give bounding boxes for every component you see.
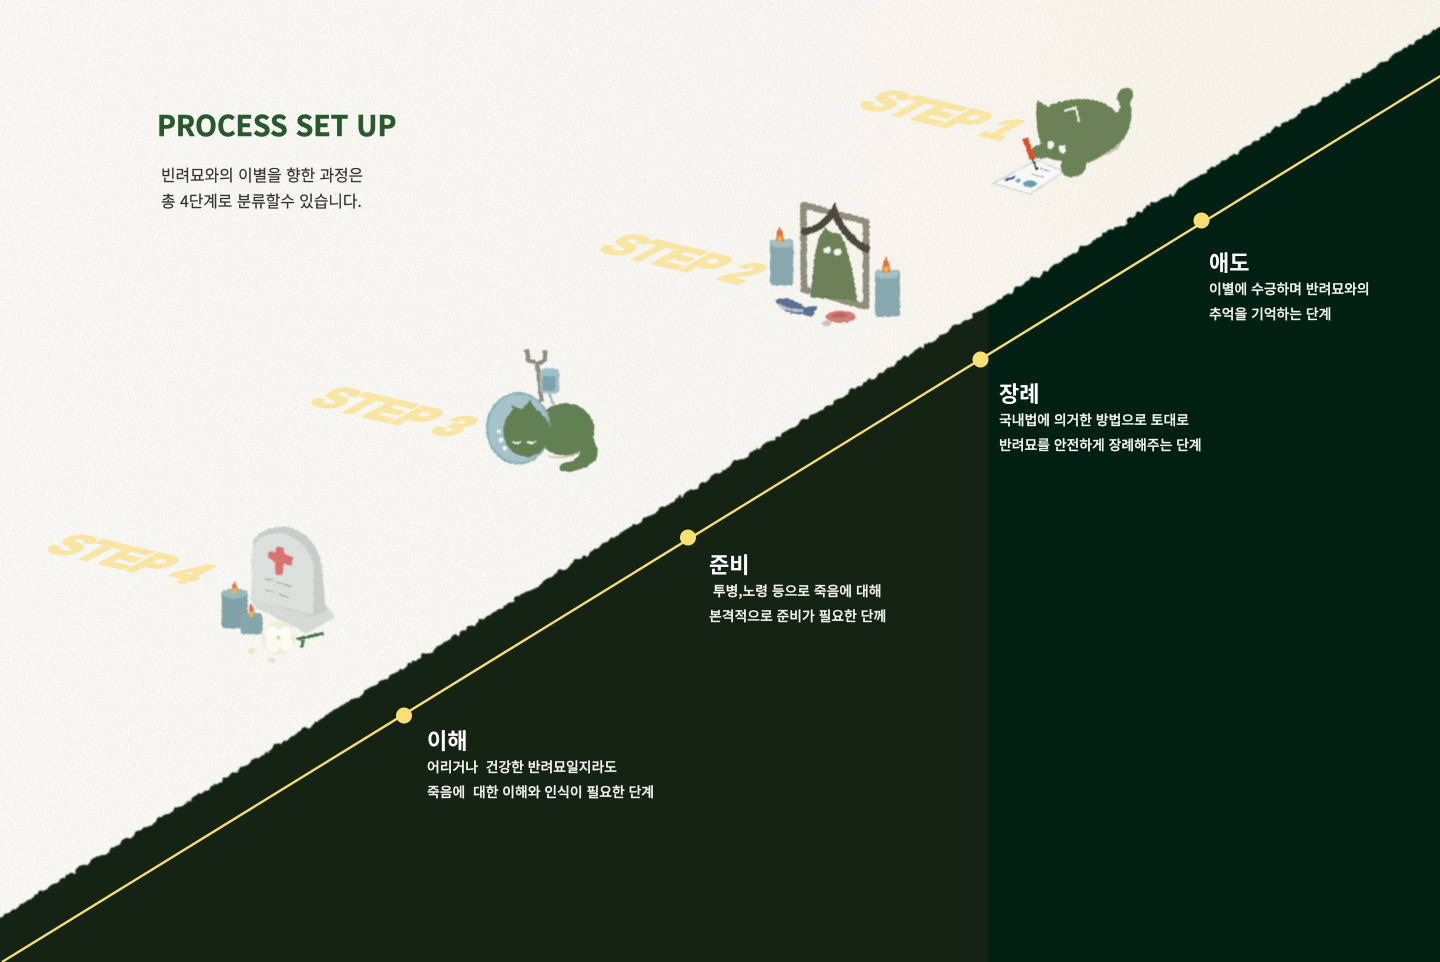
step text: 이해: 이해 [427, 724, 467, 756]
step text: 이해: 어리거나 건강한 반려묘일지라도 죽음에 대한 이해와 인식이 필요한 단계 [427, 756, 654, 801]
icon: cat in cone with IV bag [487, 349, 598, 472]
step text: 애도: 이별에 수긍하며 반려묘와의 추억을 기억하는 단계 [1209, 278, 1370, 323]
step 1 label: STEP 1 [847, 84, 1041, 145]
step text: 준비: 투병,노령 등으로 죽음에 대해 본격적으로 준비가 필요한 단께 [709, 580, 886, 625]
step text: 애도 [1209, 246, 1370, 323]
step text: 장례: 장례 [999, 377, 1039, 409]
step text: 이해 [427, 724, 654, 801]
icon: cat writing on paper [993, 88, 1133, 194]
icon: gravestone with candles and flowers [222, 527, 335, 663]
step 3 label: STEP 3 [298, 381, 492, 442]
step text: 장례 [999, 377, 1202, 454]
title: PROCESS SET UP [157, 104, 396, 145]
icon: memorial portrait with candles [770, 205, 900, 326]
step text: 준비: 준비 [709, 548, 749, 580]
step text: 준비 [709, 548, 886, 625]
step text: 애도: 애도 [1209, 246, 1249, 278]
step text: 장례: 국내법에 의거한 방법으로 토대로 반려묘를 안전하게 장례해주는 단계 [999, 409, 1202, 454]
step 4 label: STEP 4 [34, 528, 228, 589]
intro text: 빈려묘와의 이별을 향한 과정은 총 4단계로 분류할수 있습니다. [161, 162, 363, 212]
step 2 label: STEP 2 [587, 228, 781, 289]
